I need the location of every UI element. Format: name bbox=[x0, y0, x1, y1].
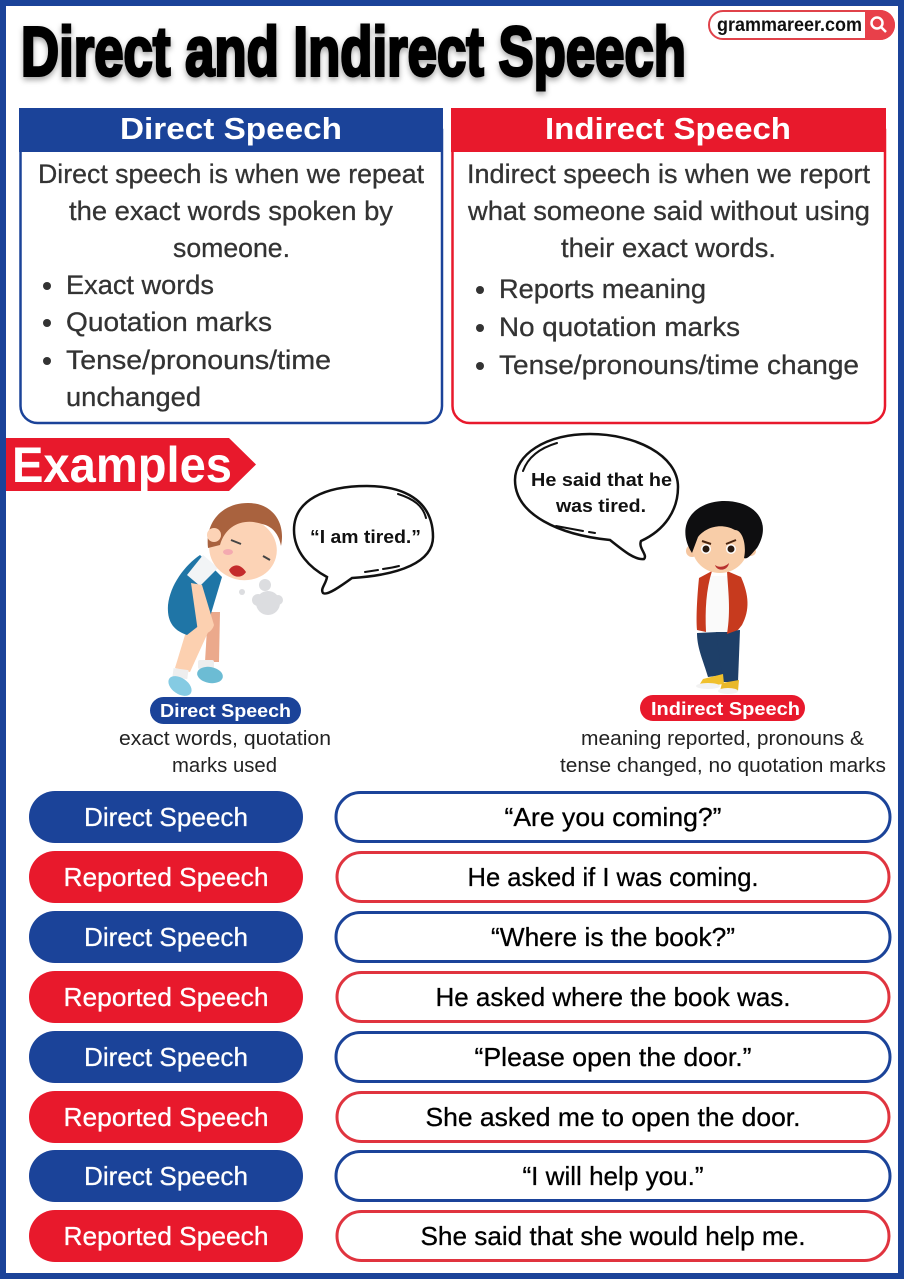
definition text: direct bbox=[38, 159, 424, 263]
panel: direct speech bbox=[19, 108, 443, 423]
website badge: grammareer.com bbox=[717, 15, 862, 36]
label pill: indirect speech: Indirect Speech bbox=[651, 699, 800, 719]
speech bubble: I am tired bbox=[294, 486, 433, 594]
illustration: tired boy bbox=[165, 503, 284, 700]
bullet list: direct: Exact words bbox=[66, 270, 214, 300]
definition text: direct: someone. bbox=[173, 233, 290, 263]
definition text: indirect: Indirect speech is when we report bbox=[467, 159, 870, 189]
row 1: direct example bbox=[29, 791, 890, 843]
bullet list: indirect: Reports meaning bbox=[499, 274, 706, 304]
row 7: direct example: “I will help you.” bbox=[522, 1161, 704, 1191]
row 8: reported example bbox=[29, 1210, 889, 1262]
bullet list: indirect bbox=[476, 274, 859, 380]
row 3: direct example: “Where is the book?” bbox=[491, 922, 735, 952]
examples heading: Examples bbox=[12, 437, 232, 493]
panel: indirect speech: Indirect Speech bbox=[545, 111, 791, 146]
definition text: indirect: their exact words. bbox=[561, 233, 776, 263]
row 2: reported example: Reported Speech bbox=[64, 862, 268, 892]
row 2: reported example bbox=[29, 851, 889, 903]
caption: indirect speech: meaning reported, pronouns & bbox=[581, 728, 865, 750]
row 6: reported example bbox=[29, 1091, 889, 1143]
row 7: direct example: Direct Speech bbox=[84, 1161, 248, 1191]
website badge bbox=[709, 10, 895, 40]
row 3: direct example: Direct Speech bbox=[84, 922, 248, 952]
speech bubble: He said that he was tired: was tired. bbox=[555, 495, 646, 516]
bullet list: direct: Tense/pronouns/time bbox=[66, 345, 331, 375]
caption: direct speech bbox=[119, 728, 331, 777]
bullet list: indirect: Tense/pronouns/time change bbox=[499, 350, 859, 380]
row 6: reported example: Reported Speech bbox=[64, 1102, 268, 1132]
row 5: direct example: Direct Speech bbox=[84, 1042, 248, 1072]
panel: indirect speech bbox=[451, 108, 886, 423]
bullet list: direct: Quotation marks bbox=[66, 307, 272, 337]
row 6: reported example: She asked me to open the door. bbox=[426, 1102, 800, 1132]
caption: indirect speech: tense changed, no quotation marks bbox=[560, 755, 886, 777]
definition text: indirect: what someone said without using bbox=[467, 196, 870, 226]
caption: indirect speech bbox=[560, 728, 886, 777]
row 2: reported example: He asked if I was coming. bbox=[468, 862, 758, 892]
title: Direct and Indirect Speech bbox=[21, 12, 686, 90]
label pill: indirect speech bbox=[640, 695, 805, 721]
row 1: direct example: “Are you coming?” bbox=[504, 802, 722, 832]
speech bubble: He said that he was tired bbox=[515, 434, 678, 559]
row 8: reported example: Reported Speech bbox=[64, 1221, 268, 1251]
speech bubble: I am tired: “I am tired.” bbox=[310, 526, 421, 547]
definition text: direct: the exact words spoken by bbox=[69, 196, 393, 226]
row 8: reported example: She said that she would help me. bbox=[420, 1221, 806, 1251]
row 3: direct example bbox=[29, 911, 890, 963]
caption: direct speech: marks used bbox=[172, 755, 277, 777]
speech bubble: He said that he was tired: He said that he bbox=[531, 469, 672, 490]
row 1: direct example: Direct Speech bbox=[84, 802, 248, 832]
definition text: indirect bbox=[467, 159, 870, 263]
row 4: reported example: He asked where the book was. bbox=[436, 982, 790, 1012]
bullet list: indirect: No quotation marks bbox=[499, 312, 740, 342]
definition text: direct: Direct speech is when we repeat bbox=[38, 159, 424, 189]
panel: direct speech: Direct Speech bbox=[120, 111, 342, 146]
label pill: direct speech: Direct Speech bbox=[160, 701, 291, 721]
bullet list: direct: unchanged bbox=[66, 382, 201, 412]
bullet list: direct bbox=[43, 270, 331, 412]
row 7: direct example bbox=[29, 1150, 890, 1202]
row 5: direct example bbox=[29, 1031, 890, 1083]
icon: search bbox=[872, 18, 886, 32]
row 4: reported example: Reported Speech bbox=[64, 982, 268, 1012]
row 5: direct example: “Please open the door.” bbox=[474, 1042, 752, 1072]
caption: direct speech: exact words, quotation bbox=[119, 728, 331, 750]
illustration: standing boy bbox=[685, 501, 763, 694]
row 4: reported example bbox=[29, 971, 889, 1023]
label pill: direct speech bbox=[150, 697, 301, 724]
